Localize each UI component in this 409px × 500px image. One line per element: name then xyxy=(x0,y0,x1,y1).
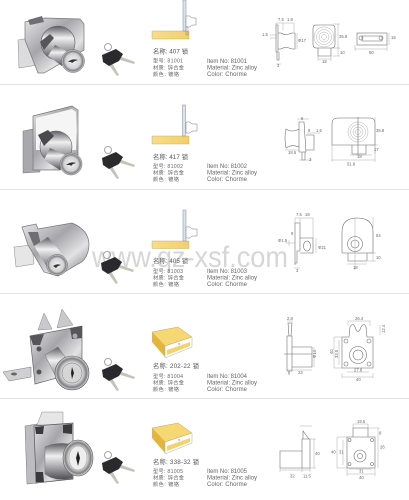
icon: keys xyxy=(102,358,135,391)
technical drawing 1: 15 xyxy=(391,35,396,40)
photo: lock 417 xyxy=(23,106,82,175)
English specs: Material: Zinc alloy xyxy=(207,380,257,386)
technical drawing 4: 40 xyxy=(329,349,334,354)
Chinese specs: 型号: 81003 xyxy=(153,267,183,275)
English specs: Item No: 81001 xyxy=(207,59,248,65)
technical drawing 2 xyxy=(285,116,385,166)
Chinese specs xyxy=(153,361,200,393)
technical drawing 4: 40 xyxy=(356,377,361,382)
drawer diagram xyxy=(152,423,192,454)
technical drawing 1: 3 xyxy=(277,63,280,68)
row 2: lock 417 xyxy=(23,105,385,183)
Chinese specs: 名称: 407 锁 xyxy=(153,46,189,56)
watermark: www.qz-xsf.com xyxy=(91,241,288,274)
mounting diagram xyxy=(152,210,197,248)
icon: keys xyxy=(101,252,134,284)
Chinese specs: 颜色: 镀铬 xyxy=(153,70,180,78)
technical drawing 3: 18 xyxy=(305,212,310,217)
technical drawing 5: 31 xyxy=(339,450,344,454)
Chinese specs: 名称: 202-22 锁 xyxy=(153,361,200,370)
Chinese specs xyxy=(153,457,200,488)
technical drawing 4: 2.8 xyxy=(287,316,293,321)
technical drawing 4: 33.5 xyxy=(334,349,339,358)
technical drawing 3: 9 xyxy=(291,231,294,236)
technical drawing 4: 26.4 xyxy=(355,316,364,321)
icon: keys xyxy=(102,452,135,484)
Chinese specs: 名称: 405 锁 xyxy=(153,256,189,265)
technical drawing 1 xyxy=(262,17,396,68)
English specs: Color: Chorme xyxy=(207,282,248,288)
Chinese specs: 材质: 锌合金 xyxy=(153,168,185,176)
technical drawing 1: Φ17 xyxy=(298,38,307,43)
photo: lock 338-32 xyxy=(25,412,93,484)
English specs: Color: Chorme xyxy=(207,482,248,488)
technical drawing 2: 18.5 xyxy=(288,150,297,155)
technical drawing 3: 10 xyxy=(376,255,381,260)
technical drawing 5: 40 xyxy=(331,450,336,454)
Chinese specs: 颜色: 镀铬 xyxy=(153,175,180,183)
technical drawing 3: 18 xyxy=(353,265,358,270)
Chinese specs: 材质: 锌合金 xyxy=(153,64,185,72)
Chinese specs: 材质: 锌合金 xyxy=(153,274,185,282)
English specs: Material: Zinc alloy xyxy=(207,476,257,482)
English specs: Material: Zinc alloy xyxy=(207,170,257,176)
technical drawing 5: 11.5 xyxy=(303,474,312,478)
technical drawing 5 xyxy=(280,419,385,480)
icon: keys xyxy=(102,146,135,179)
Chinese specs xyxy=(153,256,189,288)
technical drawing 3: Φ1.5 xyxy=(278,238,288,243)
technical drawing 3: 54 xyxy=(376,233,381,238)
technical drawing 1: 1.5 xyxy=(262,32,268,37)
technical drawing 4: Φ14 xyxy=(312,349,317,358)
technical drawing 2: 1.5 xyxy=(316,128,322,133)
English specs: Item No: 81004 xyxy=(207,374,248,380)
English specs xyxy=(207,374,257,393)
technical drawing 3: 3 xyxy=(296,268,299,273)
Chinese specs: 名称: 338-32 锁 xyxy=(153,457,200,466)
Chinese specs xyxy=(153,46,189,78)
technical drawing 4: 23 xyxy=(298,370,303,375)
technical drawing 1: 1.8 xyxy=(287,17,293,22)
Chinese specs: 材质: 锌合金 xyxy=(153,378,185,386)
English specs xyxy=(207,469,257,488)
English specs xyxy=(207,59,257,78)
technical drawing 4: 27.6 xyxy=(354,368,363,372)
English specs: Color: Chorme xyxy=(207,177,248,183)
English specs: Material: Zinc alloy xyxy=(207,66,257,72)
technical drawing 2: 17 xyxy=(374,147,379,152)
technical drawing 2: 3 xyxy=(309,157,312,162)
photo: lock 407 xyxy=(18,16,84,73)
technical drawing 3: 7.5 xyxy=(296,212,302,217)
mounting diagram xyxy=(152,105,197,144)
Chinese specs: 颜色: 镀铬 xyxy=(153,385,180,393)
technical drawing 1: 35.8 xyxy=(339,34,348,39)
technical drawing 1: 7.5 xyxy=(278,17,284,22)
technical drawing 3 xyxy=(278,212,381,273)
photo: lock 405 xyxy=(14,223,89,276)
technical drawing 1: 50 xyxy=(369,50,374,55)
technical drawing 5: 40 xyxy=(315,451,320,456)
Chinese specs xyxy=(153,152,189,183)
English specs: Material: Zinc alloy xyxy=(207,276,257,282)
Chinese specs: 型号: 81004 xyxy=(153,372,183,380)
icon: keys xyxy=(102,44,135,76)
photo: lock 202-22 xyxy=(3,309,89,390)
technical drawing 2: 8 xyxy=(301,116,304,121)
technical drawing 3: Φ21 xyxy=(318,245,327,250)
Chinese specs: 型号: 81001 xyxy=(153,56,183,64)
technical drawing 5: 26 xyxy=(380,444,385,450)
English specs: Color: Chorme xyxy=(207,387,248,393)
technical drawing 5: 19.5 xyxy=(357,419,366,424)
technical drawing 4: 12.4 xyxy=(381,324,386,333)
technical drawing 4: 8 xyxy=(288,370,291,376)
English specs xyxy=(207,164,257,183)
technical drawing 2: 9 xyxy=(308,128,311,133)
technical drawing 2: 18 xyxy=(357,154,362,159)
row 3: lock 405 xyxy=(14,210,381,288)
English specs: Item No: 81002 xyxy=(207,164,248,170)
technical drawing 2: 35.8 xyxy=(376,128,385,133)
technical drawing 5: 40 xyxy=(359,475,364,480)
technical drawing 5: 32 xyxy=(290,474,295,478)
Chinese specs: 颜色: 镀铬 xyxy=(153,480,180,488)
English specs: Item No: 81005 xyxy=(207,469,248,475)
English specs: Color: Chorme xyxy=(207,72,248,78)
Chinese specs: 名称: 417 锁 xyxy=(153,152,189,161)
English specs xyxy=(207,269,257,288)
technical drawing 5: 8 xyxy=(379,430,382,436)
Chinese specs: 材质: 锌合金 xyxy=(153,474,185,482)
row 4: lock 202-22 xyxy=(3,309,386,393)
drawer diagram xyxy=(152,327,192,358)
mounting diagram xyxy=(152,0,196,39)
technical drawing 2: 51.6 xyxy=(347,162,356,166)
technical drawing 1: 10 xyxy=(340,50,345,55)
technical drawing 5: 31 xyxy=(359,468,364,474)
technical drawing 1: 18 xyxy=(322,59,327,64)
Chinese specs: 颜色: 镀铬 xyxy=(153,280,180,288)
row 5: lock 338-32 xyxy=(25,412,385,488)
row 1: lock 407 xyxy=(18,0,396,78)
technical drawing 4 xyxy=(284,316,386,382)
Chinese specs: 型号: 81002 xyxy=(153,162,183,170)
English specs: Item No: 81003 xyxy=(207,269,248,275)
Chinese specs: 型号: 81005 xyxy=(153,467,183,475)
